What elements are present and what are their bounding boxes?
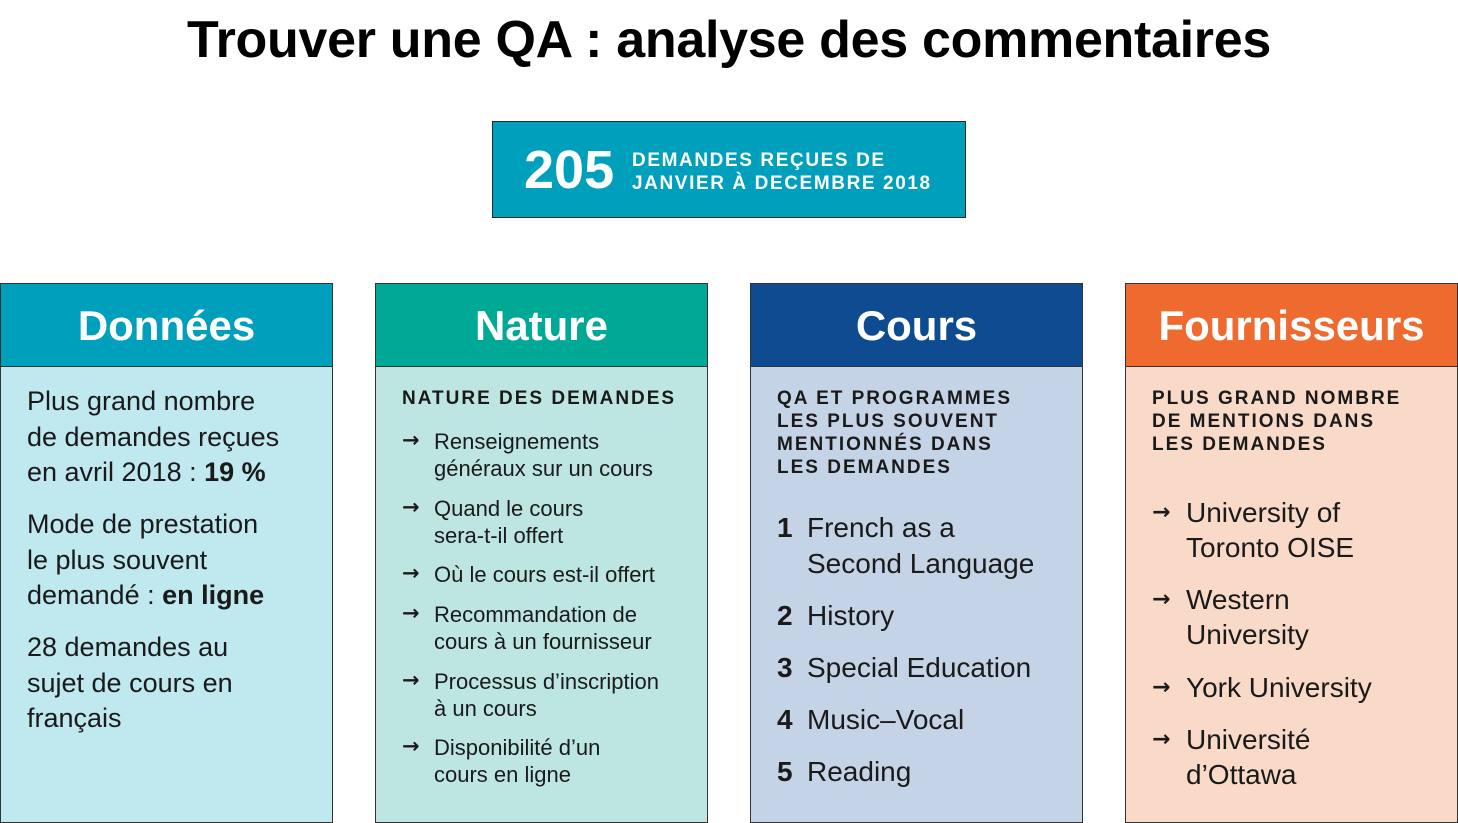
list: courses: Reading [807, 756, 911, 787]
text: français [27, 632, 233, 733]
heading: Fournisseurs: Fournisseurs [1158, 302, 1425, 349]
list: providers [1153, 497, 1372, 790]
text: avril: en avril 2018 : 19 % [27, 457, 266, 487]
list: providers: University of [1186, 497, 1340, 528]
list: courses: Special Education [807, 652, 1031, 683]
list: providers: Université [1186, 724, 1310, 755]
subheading: QA ET PROGRAMMES [777, 388, 1012, 409]
text: français: 28 demandes au [27, 632, 228, 662]
panel: Données [0, 283, 333, 823]
banner text: DEMANDES REÇUES DE [632, 150, 886, 171]
list: nature items: Quand le cours [434, 496, 583, 521]
list: nature items [403, 429, 659, 787]
heading: Fournisseurs [1126, 284, 1457, 367]
list: courses: 1 [777, 512, 793, 543]
banner text: JANVIER À DECEMBRE 2018 [632, 173, 932, 194]
list: providers: d’Ottawa [1186, 759, 1296, 790]
subheading: MENTIONNÉS DANS [777, 434, 993, 455]
subheading: NATURE DES DEMANDES [402, 388, 676, 409]
list: courses: 3 [777, 652, 793, 683]
heading: Nature [376, 284, 707, 367]
title: Trouver une QA : analyse des commentaires [187, 11, 1271, 69]
heading: Nature: Nature [475, 302, 608, 349]
list: courses: 5 [777, 756, 793, 787]
banner: total requests [492, 121, 966, 218]
list: nature items: Recommandation de [434, 602, 637, 627]
subheading: LES PLUS SOUVENT [777, 411, 999, 432]
big number: 205 [524, 140, 614, 200]
text: mode: Mode de prestation [27, 509, 258, 539]
list: providers: York University [1186, 672, 1372, 703]
list: nature items: Disponibilité d’un [434, 735, 600, 760]
list: courses: Second Language [807, 548, 1034, 579]
list: nature items: cours à un fournisseur [434, 629, 652, 654]
subheading: LES DEMANDES [1152, 434, 1327, 455]
list: courses: 4 [777, 704, 793, 735]
list: nature items: Processus d’inscription [434, 669, 659, 694]
panel: Fournisseurs [1125, 283, 1458, 823]
list: providers: Toronto OISE [1186, 532, 1354, 563]
heading: Cours: Cours [856, 302, 977, 349]
list: courses: History [807, 600, 894, 631]
text: avril: de demandes reçues [27, 422, 279, 452]
heading: Données [1, 284, 332, 367]
subheading [1152, 388, 1401, 455]
text: mode [27, 509, 264, 610]
list: providers: Western [1186, 584, 1290, 615]
list: nature items: Renseignements [434, 429, 599, 454]
heading: Cours [751, 284, 1082, 367]
heading: Données: Données [78, 302, 255, 349]
subheading: DE MENTIONS DANS [1152, 411, 1375, 432]
list: nature items: à un cours [434, 696, 537, 721]
text: avril: Plus grand nombre [27, 386, 255, 416]
list: courses [777, 512, 1034, 787]
panel: Cours [750, 283, 1083, 823]
text: français: sujet de cours en [27, 668, 233, 698]
list: providers: University [1186, 619, 1309, 650]
banner text [632, 150, 932, 194]
text: mode: le plus souvent [27, 544, 207, 574]
list: nature items: Où le cours est-il offert [434, 562, 655, 587]
list: courses: French as a [807, 512, 955, 543]
panel: Nature [375, 283, 708, 823]
text: mode: demandé : en ligne [27, 580, 264, 610]
text: français: français [27, 703, 122, 733]
list: courses: 2 [777, 600, 793, 631]
list: courses: Music–Vocal [807, 704, 964, 735]
list: nature items: cours en ligne [434, 762, 571, 787]
subheading: PLUS GRAND NOMBRE [1152, 388, 1401, 409]
list: nature items: sera-t-il offert [434, 523, 563, 548]
subheading: LES DEMANDES [777, 457, 952, 478]
list: nature items: généraux sur un cours [434, 456, 653, 481]
text: avril [27, 386, 279, 487]
subheading [777, 388, 1012, 478]
